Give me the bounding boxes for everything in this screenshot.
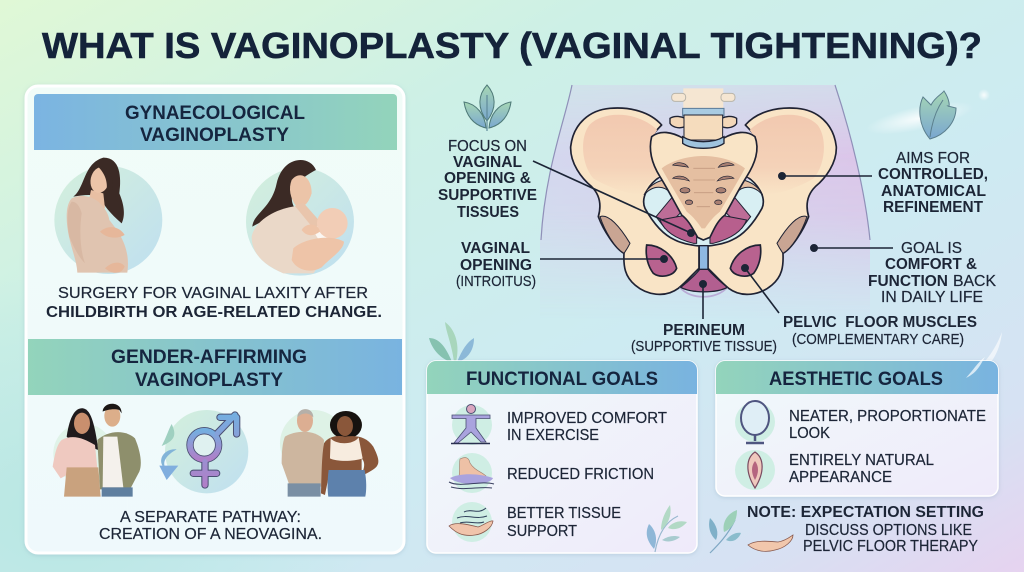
label: perineum: PERINEUM [663,322,745,339]
label: focus on vaginal opening and supportive tissues: VAGINAL [453,154,522,171]
label: focus on vaginal opening and supportive tissues [438,138,537,221]
label: goal is comfort and function: FUNCTION [868,273,948,290]
label: pelvic floor muscles: PELVIC FLOOR MUSCLES [783,314,977,331]
icon: mirror [735,401,775,443]
label: vaginal opening [456,240,536,290]
label: perineum: (SUPPORTIVE TISSUE) [631,338,777,355]
photo: young couple [53,404,141,497]
description: gender-affirming [99,509,322,543]
header: functional goals [427,361,697,394]
icon: three leaves [464,85,511,131]
header: aesthetic goals [716,361,998,394]
item: natural appearance: ENTIRELY NATURAL [789,452,934,469]
item: neater look: LOOK [789,425,831,442]
label: focus on vaginal opening and supportive tissues: SUPPORTIVE [438,187,537,204]
panel: functional goals [427,361,697,553]
label: focus on vaginal opening and supportive tissues: OPENING & [444,170,531,187]
header: gynaecological vaginoplasty: VAGINOPLASTY [140,124,289,146]
description: gender-affirming: A SEPARATE PATHWAY: [120,509,301,526]
spine vertebrae [670,88,737,140]
icon: anatomical oval [735,450,775,490]
item: natural appearance: APPEARANCE [789,469,892,486]
label: focus on vaginal opening and supportive tissues: FOCUS ON [448,138,527,155]
label: goal is comfort and function: IN DAILY LIFE [881,289,983,306]
item: improved comfort: IMPROVED COMFORT [507,410,668,427]
description: gynaecological [46,285,382,321]
label: vaginal opening: VAGINAL [461,240,530,257]
panel: vaginoplasty types [26,86,404,553]
note: expectation setting: DISCUSS OPTIONS LIKE [805,522,972,539]
label: aims for controlled refinement [878,150,988,216]
item: neater look: NEATER, PROPORTIONATE [789,408,986,425]
item: neater look [789,408,986,442]
header: gynaecological vaginoplasty: GYNAECOLOGICAL [125,102,305,124]
body silhouette [540,84,871,292]
icon: gender symbol [159,410,248,493]
icon: big leaf [920,91,956,139]
label: pelvic floor muscles: (COMPLEMENTARY CARE) [792,331,964,348]
note: expectation setting: NOTE: EXPECTATION SETTING [747,504,984,521]
decorative swoosh in aesthetic header [966,357,985,378]
photo: pregnant woman [54,158,162,274]
label: focus on vaginal opening and supportive tissues: TISSUES [457,204,519,221]
pelvis illustration [540,85,870,320]
right hip bone [708,108,836,294]
item: improved comfort: IN EXERCISE [507,427,599,444]
header: aesthetic goals: AESTHETIC GOALS [769,368,943,390]
header: functional goals: FUNCTIONAL GOALS [466,368,658,390]
item: better tissue support: BETTER TISSUE [507,505,621,522]
label: aims for controlled refinement: REFINEMENT [883,199,984,216]
label: aims for controlled refinement: AIMS FOR [896,150,970,167]
photo: older man and woman [280,409,378,497]
pubic symphysis and perineum [680,246,727,297]
description: gynaecological: CHILDBIRTH OR AGE-RELATED CHANGE. [46,304,382,321]
header: gynaecological vaginoplasty [34,94,397,150]
label: perineum [631,322,777,355]
photo: mother holding baby [246,160,354,276]
header: gender-affirming vaginoplasty [28,339,402,395]
label: aims for controlled refinement: ANATOMICAL [881,183,986,200]
note: expectation setting [709,504,984,555]
item: natural appearance [789,452,934,486]
label: aims for controlled refinement: CONTROLLED, [878,166,988,183]
icon: foot on waves [449,453,494,493]
icon: leaf sprig left of functional goals [429,322,474,362]
decorative glow swoosh [864,89,1002,378]
icon: open hand [748,535,793,551]
label: vaginal opening: (INTROITUS) [456,273,536,290]
label: goal is comfort and function: COMFORT & [885,256,977,273]
item: reduced friction: REDUCED FRICTION [507,466,654,483]
label: goal is comfort and function: BACK [953,273,997,290]
note: expectation setting: PELVIC FLOOR THERAPY [803,538,978,555]
tan bridges above openings [644,180,763,195]
label: goal is comfort and function: GOAL IS [901,240,962,257]
header: gender-affirming vaginoplasty: GENDER-AFFIRMING [111,346,307,368]
sacrum [650,132,757,240]
label: pelvic floor muscles [783,314,977,348]
pelvic skeleton [571,88,836,297]
label: vaginal opening: OPENING [460,257,532,274]
header: gender-affirming vaginoplasty: VAGINOPLASTY [135,369,283,391]
item: better tissue support [507,505,621,540]
left hip bone [571,108,699,294]
icon: leaf sprig [709,510,741,553]
item: better tissue support: SUPPORT [507,523,577,540]
icon: leaf sprig [647,505,687,552]
icon: hand with tissue waves [449,502,493,542]
description: gender-affirming: CREATION OF A NEOVAGINA. [99,526,322,543]
item: improved comfort [507,410,668,444]
icon: yoga pose [451,404,492,445]
description: gynaecological: SURGERY FOR VAGINAL LAXITY AFTER [58,285,368,302]
label: goal is comfort and function [868,240,997,306]
title: WHAT IS VAGINOPLASTY (VAGINAL TIGHTENING)? [42,25,982,66]
panel: aesthetic goals [716,361,998,496]
callout lines [533,161,893,319]
